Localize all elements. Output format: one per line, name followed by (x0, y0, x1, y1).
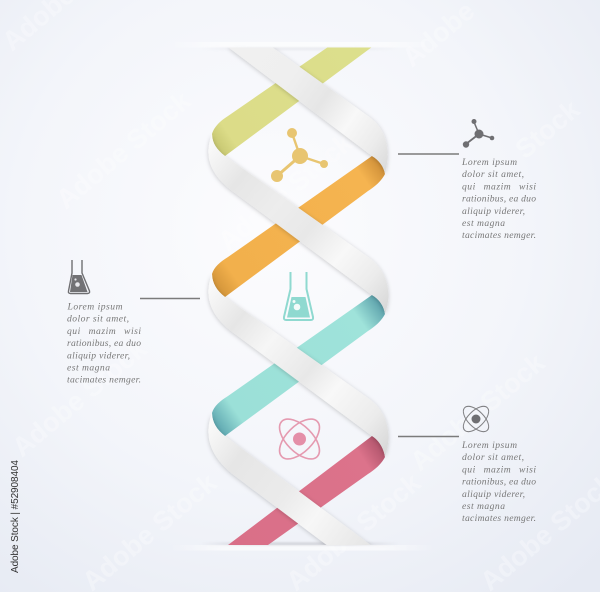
shelf band: bottom (170, 545, 435, 550)
watermark: Adobe Stock (213, 127, 359, 257)
leader line (398, 153, 459, 155)
text block: qui mazim wisi (462, 464, 536, 475)
text block: est magna (462, 501, 505, 512)
stock id label: Adobe Stock | #52908404 (10, 460, 21, 573)
ribbon: yellow (212, 47, 372, 156)
text block: rationibus, ea duo (67, 338, 141, 349)
shelf shadow: bottom (200, 543, 400, 544)
leader line (140, 298, 200, 300)
callout: atom (right bottom) (398, 402, 536, 524)
watermark: Adobe Stock (7, 333, 153, 463)
text block: Lorem ipsum (461, 440, 517, 451)
text block: aliquip viderer, (462, 206, 525, 217)
text block: est magna (462, 218, 505, 229)
text block (66, 302, 141, 386)
callout: flask (left) (66, 260, 200, 386)
text block (461, 157, 536, 241)
text block: dolor sit amet, (67, 314, 129, 325)
ribbon: white 2 (208, 134, 388, 314)
icon: small atom (459, 402, 493, 436)
text block: rationibus, ea duo (462, 477, 536, 488)
text block: qui mazim wisi (462, 181, 536, 192)
ribbon: orange (212, 156, 385, 297)
text block (461, 440, 536, 524)
text block: tacimates nemger. (462, 230, 536, 241)
text block: Lorem ipsum (66, 302, 123, 312)
ribbon: teal (212, 295, 385, 436)
leader line (398, 436, 459, 438)
shelf shadow: top (200, 48, 400, 50)
ribbon: white 4 (208, 413, 372, 546)
DNA helix (208, 47, 388, 546)
watermark: Adobe Stock (405, 347, 551, 477)
text block: dolor sit amet, (462, 169, 524, 180)
text block: tacimates nemger. (462, 513, 536, 524)
ribbon: white 3 (208, 274, 388, 457)
text block: Lorem ipsum (461, 157, 517, 168)
text block: tacimates nemger. (67, 375, 141, 386)
ribbon: white 1 (228, 47, 388, 174)
icon: small molecule (463, 119, 494, 148)
text block: aliquip viderer, (67, 350, 130, 361)
icon: large flask (284, 272, 313, 320)
icon: large molecule (271, 128, 328, 182)
text block: dolor sit amet, (462, 452, 524, 463)
text block: est magna (67, 362, 110, 374)
callout: molecule (right top) (398, 119, 536, 241)
watermark: Stock (510, 94, 586, 165)
watermark: Adobe Stock (51, 85, 197, 215)
text block: qui mazim wisi (67, 326, 141, 337)
icon: small flask (68, 260, 90, 294)
icon: large atom (273, 412, 326, 466)
shelf band: top (170, 42, 435, 48)
ribbon: pink (228, 436, 385, 545)
text block: aliquip viderer, (462, 489, 525, 500)
text block: rationibus, ea duo (462, 194, 536, 205)
